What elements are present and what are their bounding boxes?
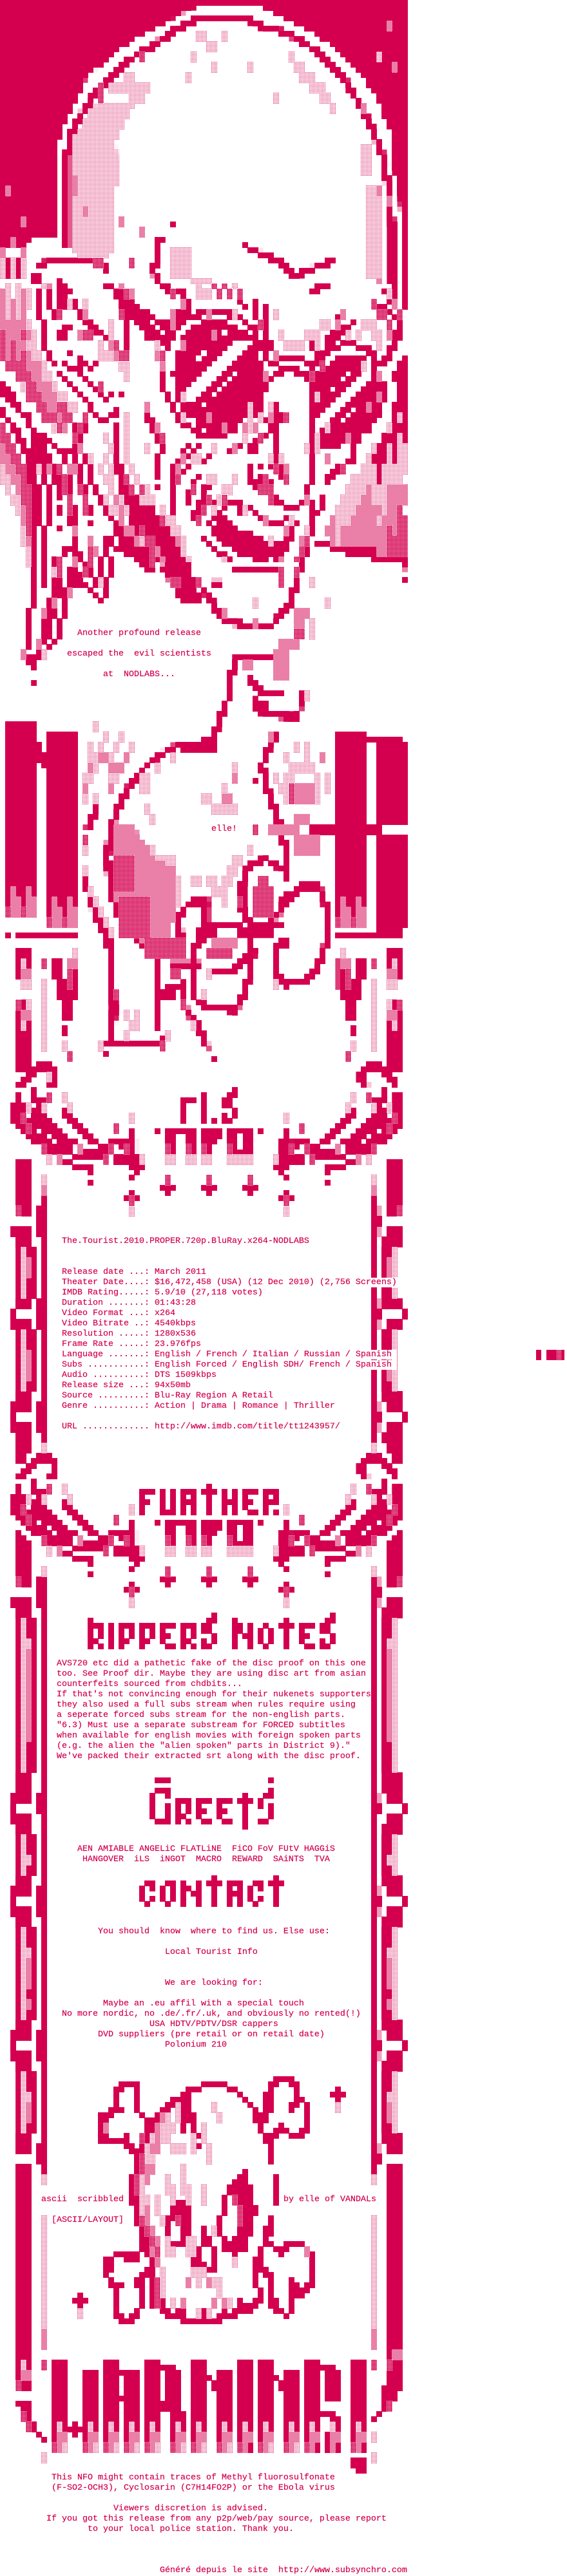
portrait: eyebrow and forehead lines bbox=[36, 224, 334, 283]
heading: WARNING! bbox=[15, 2190, 402, 2473]
skull: teeth and jaw bbox=[160, 2298, 263, 2324]
portrait: red background and bald head outline bbox=[0, 0, 407, 310]
text: ascii credit left: ascii scribbled [ASCII/LAYOUT] bbox=[41, 2195, 124, 2225]
release title: rls bbox=[155, 1088, 263, 1133]
text: release intro: Another profound release escaped the evil scientists at NODLABS... bbox=[67, 629, 211, 679]
dither shading, dark tone bbox=[0, 52, 408, 2453]
dither shading, medium tone bbox=[0, 21, 408, 2453]
right O block bbox=[309, 732, 407, 938]
portrait: beard shadow mass bbox=[129, 495, 186, 562]
text: warning body: This NFO might contain traces of Methyl fluorosulfonate (F-SO2-OCH3), Cyclosarin (C7H14FO2P) or the Ebola virus Viewers discretion is advised. If you got this release from any p2p/web/pay source, please report to your local police station. Thank you. bbox=[46, 2473, 387, 2534]
portrait: jaw and collar into neck bbox=[34, 560, 407, 708]
skull: upper left bone bbox=[98, 2081, 144, 2154]
heading: Greets bbox=[149, 1778, 273, 1829]
portrait: nose oval and cheek marks bbox=[227, 356, 407, 536]
skull: upper right bone bbox=[265, 2076, 312, 2138]
portrait: ear and left strands bbox=[0, 283, 155, 670]
heading: contact bbox=[139, 1875, 284, 1906]
frame columns, left and right bbox=[10, 948, 407, 2391]
skull: eyes bbox=[168, 2169, 258, 2257]
figure section: side blocks and looping figure bbox=[5, 708, 407, 1059]
text: ascii credit right: by elle of VANDALs bbox=[284, 2195, 376, 2204]
heading: RIPPERS NOTES bbox=[88, 1613, 336, 1649]
text: release name: The.Tourist.2010.PROPER.720p.BluRay.x264-NODLABS bbox=[62, 1236, 309, 1246]
skull and crossbones bbox=[98, 2076, 345, 2324]
cross left of skull bbox=[72, 2293, 88, 2308]
portrait: glasses frame and brow bbox=[129, 283, 407, 422]
ornament with crosses: second bbox=[13, 1454, 405, 1597]
heading: FURTHER bbox=[139, 1484, 279, 1515]
portrait: glasses, nose and mouth grid bbox=[129, 283, 407, 562]
skull: cranium outline bbox=[131, 2081, 294, 2318]
text: rippers notes: AVS720 etc did a pathetic fake of the disc proof on this one too. See Proof dir. Maybe they are using disc art from asian counterfeits sourced from chdbits... If that's not convincing enough for their nukenets supporters they also used a full subs stream when rules require using a seperate forced subs stream for the non-english parts. "6.3) Must use a separate substream for FORCED subtitles when available for english movies with foreign spoken parts (e.g. the alien the "alien spoken" parts in District 9)." We've packed their extracted srt along with the disc proof. bbox=[57, 1659, 371, 1761]
text: release details: Release date ...: March 2011 Theater Date....: $16,472,458 (USA) (12 Dec 2010) (2,756 Screens) IMDB Rating.....: 5.9/10 (27,118 votes) Duration .......: 01:43:28 Video Format ...: x264 Video Bitrate ..: 4540kbps Resolution .....: 1280x536 Frame Rate .....: 23.976fps Language .......: English / French / Italian / Russian / Spanish Subs ...........: English Forced / English SDH/ French / Spanish Audio ..........: DTS 1509kbps Release size ...: 94x50mb Source .........: Blu-Ray Region A Retail Genre ..........: Action | Drama | Romance | Thriller URL ............. http://www.imdb.com/title/tt1243957/ bbox=[62, 1267, 397, 1432]
text: elle: elle! bbox=[211, 824, 237, 834]
text: greets list: AEN AMIABLE ANGELiC FLATLiNE FiCO FoV FUtV HAGGiS HANGOVER iLS iNGOT MACRO REWARD SAiNTS TVA bbox=[77, 1844, 335, 1864]
text: generated by footer: Généré depuis le site http://www.subsynchro.com bbox=[160, 2566, 407, 2575]
skull: lower bones bbox=[106, 2241, 317, 2324]
text: contact: You should know where to find us. Else use: Local Tourist Info We are looking for: Maybe an .eu affil with a special touch No more nordic, no .de/.fr/.uk, and obviously no rented(!) USA HDTV/PDTV/DSR cappers DVD suppliers (pre retail or on retail date) Polonium 210 bbox=[62, 1927, 361, 2050]
left M block bbox=[5, 721, 77, 938]
dither shading, light tone bbox=[0, 31, 408, 2463]
portrait: glasses lenses bbox=[173, 325, 268, 438]
ornament with crosses: first bbox=[13, 1062, 405, 1206]
portrait: mouth bbox=[201, 500, 407, 562]
skull: nose bbox=[193, 2226, 216, 2272]
cross beside skull bbox=[330, 2087, 345, 2102]
solid pixel art, all sections bbox=[0, 0, 407, 2473]
overflow blocks at right edge bbox=[536, 1350, 564, 1360]
figure outline and loops bbox=[85, 708, 327, 1059]
